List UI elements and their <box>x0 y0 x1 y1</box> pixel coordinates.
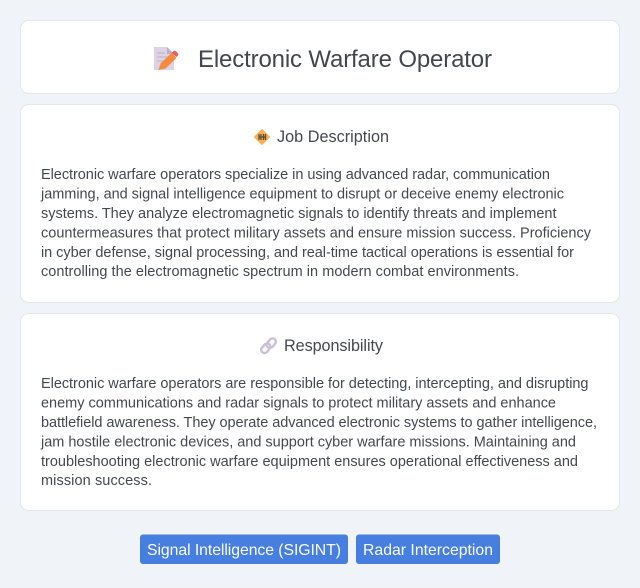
text block: responsibility: jam hostile electronic devices, and support cyber warfare missions. Maintaining and <box>40 434 576 450</box>
text block: responsibility: troubleshooting electronic warfare equipment ensures operational effectiveness and <box>41 454 578 470</box>
panel: title card <box>20 20 620 94</box>
text block: responsibility <box>40 376 597 489</box>
tag: signal intelligence <box>140 534 348 564</box>
text block: job description: jamming, and signal intelligence equipment to disrupt or deceive enemy electronic <box>40 186 564 202</box>
tag: radar interception <box>356 534 500 564</box>
text block: job description: systems. They analyze electromagnetic signals to identify threats and implement <box>41 206 556 222</box>
text block: job description: Electronic warfare operators specialize in using advanced radar, communication <box>41 167 550 183</box>
heading: job description: Job Description <box>277 128 389 146</box>
text block: responsibility: enemy communications and radar signals to protect military assets and enhance <box>41 396 556 412</box>
text block: responsibility: battlefield awareness. They operate advanced electronic systems to gather intelligence, <box>41 415 597 431</box>
text block: job description: countermeasures that protect military assets and ensure mission success. Proficiency <box>41 226 592 242</box>
text block: responsibility: Electronic warfare operators are responsible for detecting, intercepting, and disrupting <box>41 376 588 392</box>
icon: document with pencil <box>154 47 178 70</box>
tag: radar interception: Radar Interception <box>363 542 493 559</box>
icon: chain link <box>260 337 277 354</box>
text block: job description: in cyber defense, signal processing, and real-time tactical operations is essential for <box>41 245 574 261</box>
panel: job description <box>20 104 620 302</box>
title: Electronic Warfare Operator <box>198 46 492 73</box>
text block: job description <box>40 167 592 280</box>
panel: responsibility <box>20 314 620 510</box>
icon: orange diamond sign <box>254 130 270 144</box>
text block: job description: controlling the electromagnetic spectrum in modern combat environments. <box>41 264 519 280</box>
heading: responsibility: Responsibility <box>284 337 384 355</box>
tag: signal intelligence: Signal Intelligence (SIGINT) <box>147 542 341 559</box>
text block: responsibility: mission success. <box>41 473 152 489</box>
